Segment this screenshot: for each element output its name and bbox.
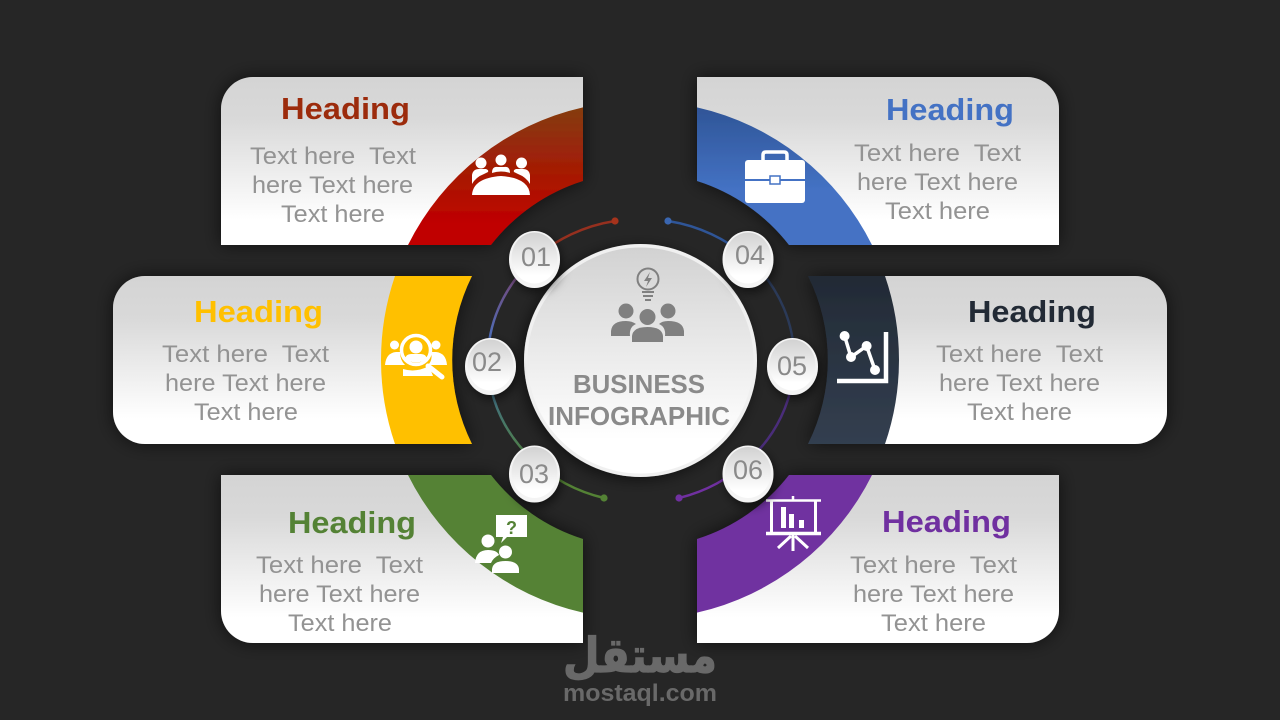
body text: here Text here (939, 370, 1100, 397)
watermark logo (563, 628, 717, 707)
badge 03: 03 (519, 459, 549, 489)
disc (524, 244, 757, 477)
center disc (524, 244, 757, 477)
card shape with band (697, 77, 1059, 245)
title: INFOGRAPHIC (548, 401, 730, 431)
latin wordmark: mostaql.com (563, 680, 717, 707)
body text: Text here (288, 610, 392, 637)
badge 04 (722, 231, 774, 288)
panel: middle left card (113, 276, 472, 444)
icon: magnifier over people (385, 336, 447, 377)
card shape with band (221, 77, 583, 245)
panel: top left card (221, 77, 583, 245)
heading: Heading (288, 505, 416, 540)
body text: here Text here (259, 581, 420, 608)
body text (162, 341, 329, 426)
card shape with band (808, 276, 1167, 444)
badge 06: 06 (733, 455, 763, 485)
body text (854, 140, 1021, 225)
panel: bottom right card (697, 475, 1059, 643)
body text: Text here Text (256, 552, 423, 579)
body text: Text here (281, 201, 385, 228)
badge 02: 02 (472, 347, 502, 377)
badge 01: 01 (521, 242, 551, 272)
body text (850, 552, 1017, 637)
arabic wordmark: مستقل (563, 628, 717, 684)
body text: Text here Text (162, 341, 329, 368)
heading: Heading (886, 92, 1014, 127)
body text: here Text here (252, 172, 413, 199)
heading: Heading (968, 294, 1096, 329)
body text: Text here Text (250, 143, 416, 170)
icon: people with question bubble (475, 515, 527, 573)
body text (250, 143, 416, 228)
body text: Text here (194, 399, 298, 426)
panel: bottom left card (221, 475, 583, 643)
body text (936, 341, 1103, 426)
body text: here Text here (857, 169, 1018, 196)
badge 06 (722, 446, 774, 502)
ring of connector arcs (488, 217, 794, 502)
heading: Heading (194, 294, 323, 329)
body text: Text here Text (854, 140, 1021, 167)
icon: people with question bubble: ? (506, 518, 517, 538)
body text: Text here Text (850, 552, 1017, 579)
panel: middle right card (808, 276, 1167, 444)
badge 02 (465, 338, 516, 395)
icon: presentation board (766, 496, 821, 551)
body text (256, 552, 423, 637)
heading: Heading (281, 91, 410, 126)
icon: people at table (472, 154, 530, 195)
card shape with band (113, 276, 472, 444)
body text: Text here (885, 198, 990, 225)
body text: here Text here (165, 370, 326, 397)
heading: Heading (882, 504, 1011, 539)
badge 03 (509, 446, 560, 502)
body text: Text here (881, 610, 986, 637)
body text: Text here Text (936, 341, 1103, 368)
card shape with band (697, 475, 1059, 643)
body text: here Text here (853, 581, 1014, 608)
badge 01 (509, 231, 560, 288)
icon: line chart (837, 331, 886, 381)
body text: Text here (967, 399, 1072, 426)
icon: briefcase (745, 152, 805, 203)
title: BUSINESS (573, 369, 705, 399)
badge 05 (767, 338, 818, 395)
panel: top right card (697, 77, 1059, 245)
icon: lightbulb over team (611, 268, 684, 342)
number badges (465, 231, 818, 502)
badge 04: 04 (735, 240, 765, 270)
badge 05: 05 (777, 351, 807, 381)
title (548, 369, 730, 431)
card shape with band (221, 475, 583, 643)
